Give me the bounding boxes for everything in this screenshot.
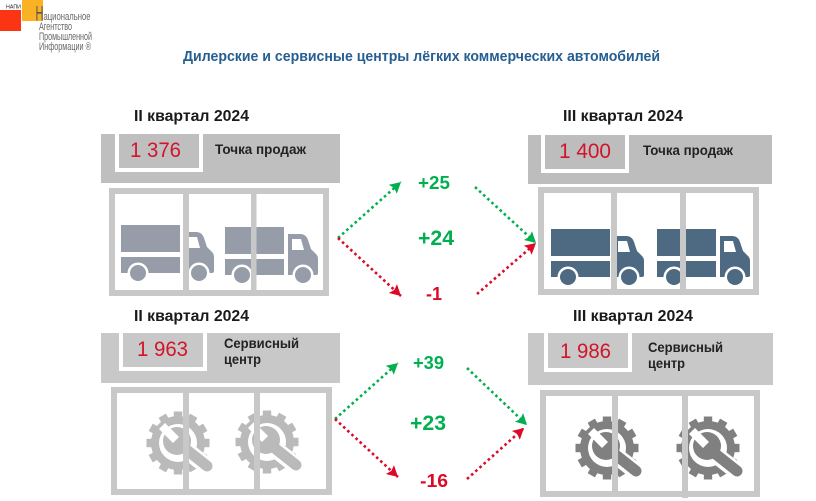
header band: Сервисный	[648, 340, 723, 355]
panel: sales points Q3	[528, 108, 772, 295]
logo: НАПИ: Н	[36, 2, 44, 26]
panel: service centres Q3	[528, 308, 773, 498]
showcase frame with gears	[543, 390, 757, 498]
panel: service centres Q2	[101, 308, 340, 495]
title: Дилерские и сервисные центры лёгких коммерческих автомобилей	[183, 49, 660, 65]
value: net +23: +23	[410, 412, 446, 435]
header band	[528, 135, 772, 184]
logo: НАПИ: Агентство	[39, 21, 72, 33]
logo: НАПИ: Информации ®	[39, 41, 91, 53]
icon: truck	[657, 229, 750, 288]
value: closed -1: -1	[426, 284, 442, 304]
heading: quarter II: II квартал 2024	[134, 308, 249, 325]
logo: НАПИ: НАПИ	[6, 4, 21, 10]
logo: НАПИ	[0, 0, 92, 53]
header band: 1 963	[137, 338, 188, 361]
panel: sales points Q2	[101, 108, 340, 296]
header band: 1 400	[559, 140, 611, 163]
heading: quarter III: III квартал 2024	[563, 108, 683, 125]
icon: gear with wrench	[676, 416, 740, 480]
icon: truck	[225, 227, 318, 286]
heading: quarter III: III квартал 2024	[573, 308, 693, 325]
icon: gear with wrench	[576, 416, 638, 480]
arrows: sales points	[338, 182, 536, 296]
header band: 1 376	[130, 139, 181, 162]
value: opened +25: +25	[418, 173, 450, 193]
icon: truck	[121, 225, 214, 284]
header band: 1 986	[560, 340, 611, 363]
header band: Точка продаж	[643, 143, 733, 158]
header band: Сервисный	[224, 336, 299, 351]
showcase frame with gears	[114, 387, 329, 495]
logo: НАПИ: Промышленной	[39, 31, 92, 43]
header band: центр	[648, 356, 685, 371]
header band: Точка продаж	[215, 142, 306, 157]
icon: truck	[551, 229, 644, 288]
value: closed -16: -16	[420, 471, 448, 491]
showcase frame with trucks	[112, 188, 326, 296]
showcase frame with trucks	[541, 187, 756, 295]
header band	[101, 333, 340, 383]
value: opened +39: +39	[413, 353, 444, 373]
value: net +24: +24	[418, 227, 454, 250]
heading: quarter II: II квартал 2024	[134, 108, 249, 125]
header band	[528, 333, 773, 385]
header band	[101, 134, 340, 183]
icon: gear with wrench	[236, 410, 298, 474]
arrows: service centres	[335, 363, 527, 479]
logo: НАПИ: ациональное	[44, 11, 90, 23]
header band: центр	[224, 352, 261, 367]
icon: gear with wrench	[146, 412, 210, 474]
